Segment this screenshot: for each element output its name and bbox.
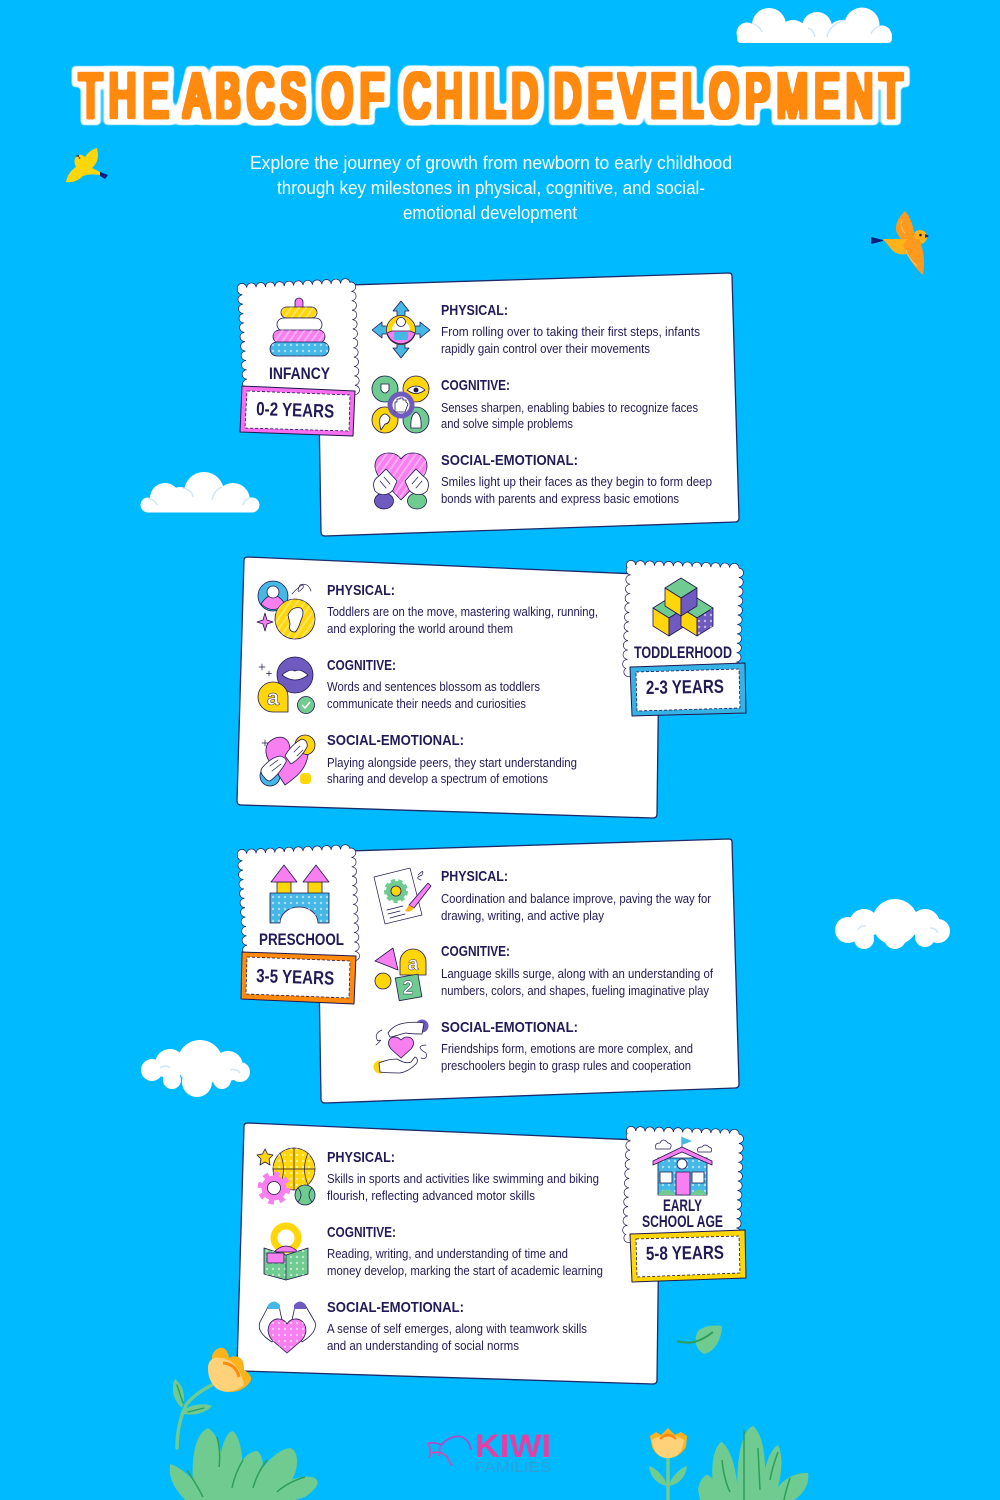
subtitle: emotional development — [403, 203, 577, 223]
stage name: TODDLERHOOD — [634, 644, 732, 662]
subtitle: through key milestones in physical, cognitive, and social- — [277, 178, 705, 198]
icon: building blocks — [653, 578, 713, 636]
text: physical: and exploring the world around them — [327, 622, 513, 636]
stamp: toddlerhood — [627, 565, 739, 672]
panel: infancy — [240, 273, 739, 536]
icon: shapes and letters: 2 — [403, 978, 413, 999]
age badge: 2-3 YEARS — [646, 677, 724, 699]
cloud left upper — [140, 472, 260, 517]
icon: baby and footprint — [257, 581, 315, 639]
stamp: preschool — [242, 849, 355, 962]
text: physical: PHYSICAL: — [441, 868, 508, 885]
cloud right middle — [835, 899, 950, 949]
panel: early school age — [237, 1123, 746, 1384]
text: social-emotional: SOCIAL-EMOTIONAL: — [441, 452, 578, 469]
text: cognitive: communicate their needs and curiosities — [327, 697, 526, 711]
age badge: 3-5 YEARS — [256, 966, 335, 990]
stamp: early school age — [627, 1131, 739, 1238]
icon: movement arrows — [372, 301, 430, 358]
text: physical: From rolling over to taking their first steps, infants — [441, 325, 700, 339]
stage name — [642, 1197, 723, 1231]
logo: Kiwi Families: FAMILIES — [475, 1459, 551, 1476]
icon: green leaf — [677, 1326, 722, 1354]
text: cognitive — [327, 1224, 603, 1278]
text: social-emotional: A sense of self emerges, along with teamwork skills — [327, 1322, 587, 1336]
text: physical — [327, 1149, 599, 1203]
text: physical: rapidly gain control over their movements — [441, 342, 650, 356]
icon: orange bird — [871, 211, 929, 275]
text: cognitive: numbers, colors, and shapes, fueling imaginative play — [441, 984, 710, 998]
stage name: INFANCY — [269, 365, 330, 383]
icon: ring stacker toy — [270, 298, 329, 356]
text: cognitive: Words and sentences blossom as toddlers — [327, 680, 540, 694]
text: social-emotional: SOCIAL-EMOTIONAL: — [327, 1299, 464, 1316]
text: cognitive: COGNITIVE: — [327, 1224, 396, 1241]
text: social-emotional: SOCIAL-EMOTIONAL: — [327, 732, 464, 749]
icon: heart and hands — [374, 453, 428, 509]
text: cognitive: Language skills surge, along with an understanding of — [441, 967, 713, 981]
age badge: 5-8 YEARS — [646, 1243, 724, 1265]
stage name: EARLY — [663, 1197, 702, 1215]
logo: Kiwi Families — [428, 1428, 551, 1476]
text: cognitive: Senses sharpen, enabling babies to recognize faces — [441, 401, 698, 415]
text: cognitive: COGNITIVE: — [441, 377, 510, 394]
icon: drawing on paper — [374, 868, 431, 924]
plant: yellow flower right — [649, 1428, 687, 1500]
title: OF — [322, 62, 391, 131]
icon: lips and letter — [258, 657, 314, 714]
plant: bush right — [698, 1426, 808, 1500]
text: physical: Coordination and balance improve, paving the way for — [441, 892, 711, 906]
icon: block castle — [270, 865, 329, 923]
age badge: 0-2 YEARS — [256, 399, 335, 423]
text: social-emotional: bonds with parents and express basic emotions — [441, 492, 679, 506]
age badge — [630, 1230, 746, 1282]
cloud top right — [736, 8, 892, 43]
text: cognitive: COGNITIVE: — [327, 657, 396, 674]
icon: lips and letter: a — [267, 685, 280, 710]
subtitle: Explore the journey of growth from newborn to early childhood — [250, 153, 732, 173]
text: social-emotional — [441, 452, 712, 506]
icon: shapes and letters — [375, 948, 426, 1001]
icon: holding hands — [260, 735, 315, 786]
text: social-emotional: SOCIAL-EMOTIONAL: — [441, 1019, 578, 1036]
text: social-emotional: sharing and develop a spectrum of emotions — [327, 772, 548, 786]
title: THE — [79, 62, 175, 131]
card background — [237, 557, 660, 818]
icon: school house — [653, 1137, 712, 1195]
text: physical: Toddlers are on the move, mastering walking, running, — [327, 605, 598, 619]
text: social-emotional: and an understanding of social norms — [327, 1339, 519, 1353]
text: social-emotional — [441, 1019, 693, 1073]
title: ABCS — [184, 62, 312, 131]
text: physical — [441, 302, 700, 356]
icon: shapes and letters: a — [408, 954, 419, 975]
subtitle — [250, 153, 732, 223]
stage name: SCHOOL AGE — [642, 1213, 723, 1231]
card background — [237, 1123, 660, 1384]
text: physical: flourish, reflecting advanced motor skills — [327, 1189, 535, 1203]
text: social-emotional — [327, 1299, 587, 1353]
icon: child reading book — [264, 1226, 308, 1280]
panel: preschool — [241, 839, 739, 1103]
text: physical: Skills in sports and activities like swimming and biking — [327, 1172, 599, 1186]
text: cognitive — [441, 943, 713, 998]
icon: hands and heart — [259, 1302, 315, 1353]
text: cognitive — [327, 657, 540, 711]
text: physical: PHYSICAL: — [441, 302, 508, 319]
text: cognitive — [441, 377, 698, 431]
cloud left lower — [141, 1040, 250, 1097]
age badge — [241, 952, 356, 1004]
stage name: PRESCHOOL — [259, 931, 344, 949]
text: physical — [441, 868, 711, 923]
logo: Kiwi Families: KIWI — [475, 1428, 551, 1464]
title — [79, 62, 909, 131]
icon: five senses — [372, 376, 429, 433]
card background — [317, 273, 739, 536]
text: cognitive: Reading, writing, and understanding of time and — [327, 1247, 568, 1261]
plant: orange flower left — [173, 1348, 251, 1448]
text: social-emotional: Friendships form, emotions are more complex, and — [441, 1042, 693, 1056]
icon: yellow bird — [66, 148, 108, 182]
age badge — [630, 663, 746, 716]
text: social-emotional: preschoolers begin to grasp rules and cooperation — [441, 1059, 691, 1073]
card background — [317, 839, 739, 1103]
text: cognitive: and solve simple problems — [441, 417, 573, 431]
icon: sports balls and gear — [257, 1148, 315, 1205]
text: physical: PHYSICAL: — [327, 1149, 395, 1166]
text: cognitive: COGNITIVE: — [441, 943, 510, 960]
plant: bush left — [170, 1428, 318, 1500]
text: social-emotional — [327, 732, 577, 786]
title: CHILD — [404, 62, 544, 131]
panel: toddlerhood — [237, 557, 746, 818]
age badge — [240, 386, 355, 436]
text: physical: drawing, writing, and active play — [441, 909, 605, 923]
text: social-emotional: Playing alongside peers, they start understanding — [327, 756, 577, 770]
text: cognitive: money develop, marking the start of academic learning — [327, 1264, 603, 1278]
text: social-emotional: Smiles light up their faces as they begin to form deep — [441, 475, 712, 489]
text: physical: PHYSICAL: — [327, 582, 395, 599]
icon: hands holding heart — [374, 1020, 428, 1074]
stamp: infancy — [242, 283, 355, 396]
text: physical — [327, 582, 598, 636]
